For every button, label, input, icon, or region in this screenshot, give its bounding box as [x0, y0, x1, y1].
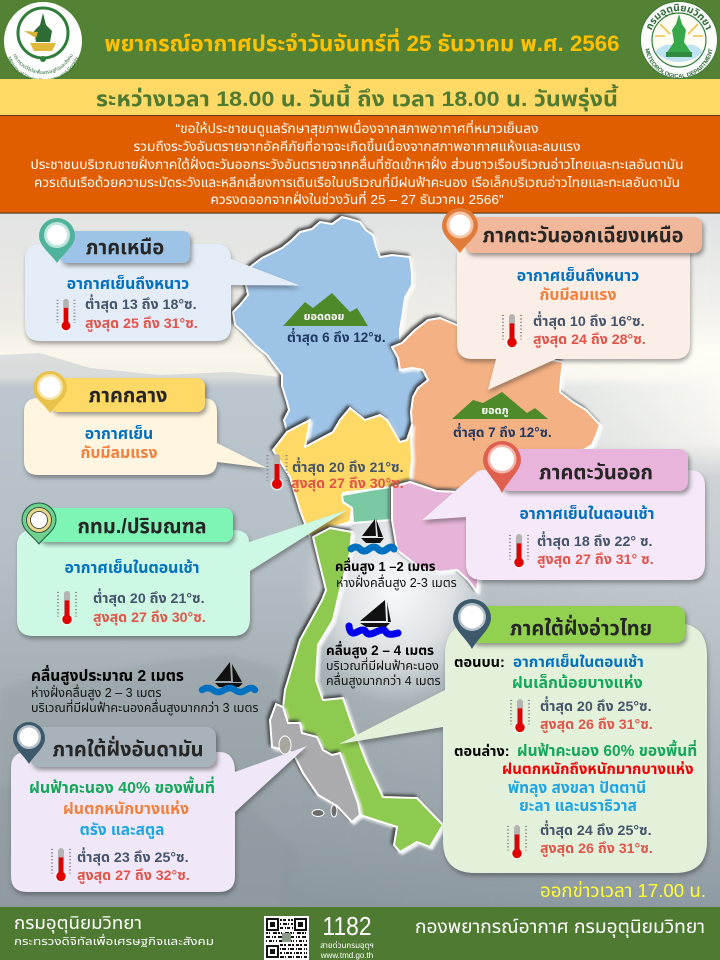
- panel: northeast region: [442, 208, 702, 390]
- lower section: สูงสุด 26 ถึง 31°ซ.: [540, 841, 653, 858]
- region: east: [392, 482, 500, 592]
- callout: central temperatures on map: [268, 454, 404, 493]
- wave note: Andaman sea: บริเวณที่มีฝนฟ้าคะนองคลื่นสูงมากกว่า 3 เมตร: [31, 699, 258, 715]
- panel: south Andaman: ต่ำสุด 23 ถึง 25°ซ.: [77, 847, 189, 866]
- wave note: Andaman sea: [31, 662, 258, 715]
- QR code: [264, 916, 309, 960]
- time band: [0, 79, 720, 115]
- panel: Bangkok and vicinity: กทม./ปริมณฑล: [77, 516, 207, 538]
- wave note: lower Gulf: คลื่นสูง 2 – 4 เมตร: [326, 641, 434, 660]
- pin: [13, 722, 45, 764]
- callout: central temperatures on map: สูงสุด 27 ถึง 30°ซ.: [291, 476, 404, 493]
- footer band: [0, 907, 720, 960]
- logo: ministry: Ministry of Digital Economy and Society: [8, 56, 79, 79]
- title: พยากรณ์อากาศประจำวันจันทร์ที่ 25 ธันวาคม พ.ศ. 2566: [104, 28, 620, 56]
- wave note: upper Gulf: ห่างฝั่งคลื่นสูง 2-3 เมตร: [336, 574, 457, 590]
- bubble: [422, 470, 705, 580]
- lower section: ฝนตกหนักถึงหนักมากบางแห่ง: [502, 760, 694, 778]
- panel: east region: อากาศเย็นในตอนเช้า: [519, 505, 655, 523]
- panel: northeast region: ต่ำสุด 10 ถึง 16°ซ.: [533, 311, 645, 330]
- warning panel: รวมถึงระวังอันตรายจากอัคคีภัยที่อาจจะเกิดขึ้นเนื่องจากสภาพอากาศแห้งและลมแรง: [134, 137, 581, 154]
- header pill: [465, 217, 702, 253]
- map of Thailand: [233, 217, 600, 852]
- mountain: northeastern peak: ยอดภู: [481, 405, 509, 417]
- upper section: ตอนบน:: [454, 655, 505, 671]
- logo: Thai Meteorological Department: กรมอุตุนิยมวิทยา: [647, 4, 711, 30]
- warning panel: ประชาชนบริเวณชายฝั่งภาคใต้ฝั่งตะวันออกระวังอันตรายจากคลื่นที่ซัดเข้าหาฝั่ง ส่วนชาวเรือบริเวณอ่าวไทยและทะเลอันดามัน: [30, 155, 684, 172]
- islands: [312, 810, 324, 816]
- bubble: [11, 746, 307, 892]
- wave note: lower Gulf: คลื่นสูงมากกว่า 4 เมตร: [326, 672, 441, 688]
- logo: Thai Meteorological Department: [640, 1, 718, 79]
- hotline: 1182: [322, 911, 372, 941]
- panel: northeast region: สูงสุด 24 ถึง 28°ซ.: [533, 332, 646, 349]
- wave note: lower Gulf: บริเวณที่มีฝนฟ้าคะนอง: [326, 657, 439, 673]
- bubble: [25, 244, 300, 341]
- header band: [0, 0, 720, 79]
- panel: Bangkok and vicinity: สูงสุด 27 ถึง 30°ซ.: [93, 610, 206, 627]
- pin: [22, 503, 56, 544]
- lower section: ยะลา และนราธิวาส: [519, 798, 637, 815]
- region: northeast: [392, 318, 600, 492]
- bubble: [17, 510, 347, 636]
- lower section: พัทลุง สงขลา ปัตตานี: [508, 780, 646, 797]
- panel: north region: [25, 218, 300, 341]
- lower section: ฝนฟ้าคะนอง 60% ของพื้นที่: [517, 739, 697, 760]
- warning panel: [0, 115, 720, 213]
- hotline: สายด่วนกรมอุตุฯ: [320, 940, 374, 950]
- time band: ระหว่างเวลา 18.00 น. วันนี้ ถึง เวลา 18.00 น. วันพรุ่งนี้: [96, 84, 619, 112]
- panel: east region: ต่ำสุด 18 ถึง 22° ซ.: [537, 531, 652, 550]
- panel: east region: สูงสุด 27 ถึง 31° ซ.: [537, 552, 654, 569]
- header pill: [50, 378, 205, 412]
- wave note: lower Gulf: [326, 600, 441, 688]
- warning panel: ควรงดออกจากฝั่งในช่วงวันที่ 25 – 27 ธันวาคม 2566”: [210, 190, 504, 207]
- panel: Bangkok and vicinity: อากาศเย็นในตอนเช้า: [64, 559, 200, 577]
- panel: east region: ภาคตะวันออก: [539, 462, 653, 484]
- panel: Bangkok and vicinity: [17, 503, 347, 636]
- mountain: northeastern peak: [452, 392, 552, 441]
- panel: east region: [422, 441, 705, 580]
- issue time: ออกข่าวเวลา 17.00 น.: [540, 880, 706, 901]
- header pill: [60, 231, 190, 263]
- header pill: [38, 508, 233, 542]
- bubble: [457, 240, 690, 390]
- wave note: upper Gulf: [335, 519, 457, 590]
- pin: [33, 371, 67, 413]
- pin: [453, 599, 491, 649]
- warning panel: “ขอให้ประชาชนดูแลรักษาสุขภาพเนื่องจากสภาพอากาศที่หนาวเย็นลง: [176, 119, 539, 136]
- region: central: [273, 408, 412, 537]
- logo: ministry: [4, 2, 82, 79]
- panel: northeast region: ภาคตะวันออกเฉียงเหนือ: [482, 225, 684, 247]
- header pill: [500, 449, 688, 491]
- upper section: ฝนเล็กน้อยบางแห่ง: [512, 674, 643, 692]
- region: south Gulf side: [283, 528, 443, 852]
- region: Bangkok and surroundings: [342, 487, 390, 523]
- footer: department name: กระทรวงดิจิทัลเพื่อเศรษฐกิจและสังคม: [14, 933, 214, 948]
- mountain: northern peak: ยอดดอย: [304, 311, 344, 323]
- panel: northeast region: อากาศเย็นถึงหนาว: [517, 267, 639, 285]
- panel: south Andaman: ภาคใต้ฝั่งอันดามัน: [52, 736, 204, 761]
- pin: [39, 218, 75, 263]
- upper section: ต่ำสุด 20 ถึง 25°ซ.: [540, 696, 652, 715]
- panel: south Andaman: ตรัง และสตูล: [80, 822, 164, 840]
- logo: Thai Meteorological Department: METEOROLOGICAL DEPARTMENT: [645, 48, 712, 78]
- panel: central region: ภาคกลาง: [89, 385, 167, 407]
- panel: northeast region: กับมีลมแรง: [539, 287, 617, 304]
- hotline: www.tmd.go.th: [320, 951, 373, 960]
- panel: south Andaman: ฝนฟ้าคะนอง 40% ของพื้นที่: [29, 776, 215, 797]
- bubble: [24, 398, 267, 475]
- panel: south Andaman: สูงสุด 27 ถึง 32°ซ.: [77, 868, 190, 885]
- header pill: [470, 606, 685, 643]
- header pill: [30, 727, 216, 767]
- panel: south Gulf of Thailand: [339, 599, 707, 873]
- wave note: Andaman sea: คลื่นสูงประมาณ 2 เมตร: [31, 664, 184, 686]
- panel: south Gulf of Thailand: ภาคใต้ฝั่งอ่าวไทย: [510, 615, 652, 640]
- hotline: [320, 911, 374, 960]
- panel: north region: อากาศเย็นถึงหนาว: [67, 275, 189, 293]
- warning panel: ควรเดินเรือด้วยความระมัดระวังและหลีกเลี่ยงการเดินเรือในบริเวณที่มีฝนฟ้าคะนอง เรือเล็กบริเวณอ่าวไทยและทะเลอันดามัน: [34, 173, 680, 190]
- pin: [483, 441, 521, 493]
- upper section: สูงสุด 26 ถึง 31°ซ.: [540, 717, 653, 734]
- lower section: [454, 739, 697, 860]
- lower section: ตอนล่าง:: [454, 743, 510, 760]
- logo: ministry: กระทรวงดิจิทัลเพื่อเศรษฐกิจและสังคม: [13, 54, 73, 74]
- mountain: northern peak: [283, 293, 386, 346]
- panel: central region: อากาศเย็น: [85, 425, 153, 443]
- footer: department name: [14, 913, 214, 948]
- mountain: northeastern peak: ต่ำสุด 7 ถึง 12°ซ.: [453, 423, 552, 441]
- bubble: [339, 623, 707, 873]
- callout: central temperatures on map: ต่ำสุด 20 ถึง 21°ซ.: [292, 457, 404, 476]
- panel: central region: กับมีลมแรง: [80, 445, 158, 462]
- panel: south Andaman: ฝนตกหนักบางแห่ง: [63, 800, 189, 818]
- upper section: [454, 653, 653, 734]
- region: south Andaman side: [270, 704, 360, 822]
- upper section: อากาศเย็นในตอนเช้า: [513, 653, 644, 671]
- panel: north region: สูงสุด 25 ถึง 31°ซ.: [85, 316, 198, 333]
- panel: Bangkok and vicinity: ต่ำสุด 20 ถึง 21°ซ.: [93, 588, 205, 607]
- wave note: Andaman sea: ห่างฝั่งคลื่นสูง 2 – 3 เมตร: [31, 684, 162, 700]
- footer: department name: กรมอุตุนิยมวิทยา: [14, 913, 142, 934]
- mountain: northern peak: ต่ำสุด 6 ถึง 12°ซ.: [287, 328, 386, 346]
- pin: [442, 208, 478, 253]
- background: misty mountain sky: [0, 214, 720, 907]
- panel: central region: [24, 371, 267, 475]
- lower section: ต่ำสุด 24 ถึง 25°ซ.: [540, 820, 652, 839]
- panel: north region: ภาคเหนือ: [86, 237, 164, 259]
- panel: south Andaman: [11, 722, 307, 892]
- panel: north region: ต่ำสุด 13 ถึง 18°ซ.: [85, 294, 197, 313]
- forecast bureau: กองพยากรณ์อากาศ กรมอุตุนิยมวิทยา: [415, 917, 705, 938]
- region: north: [233, 217, 428, 447]
- wave note: upper Gulf: คลื่นสูง 1 –2 เมตร: [335, 557, 436, 575]
